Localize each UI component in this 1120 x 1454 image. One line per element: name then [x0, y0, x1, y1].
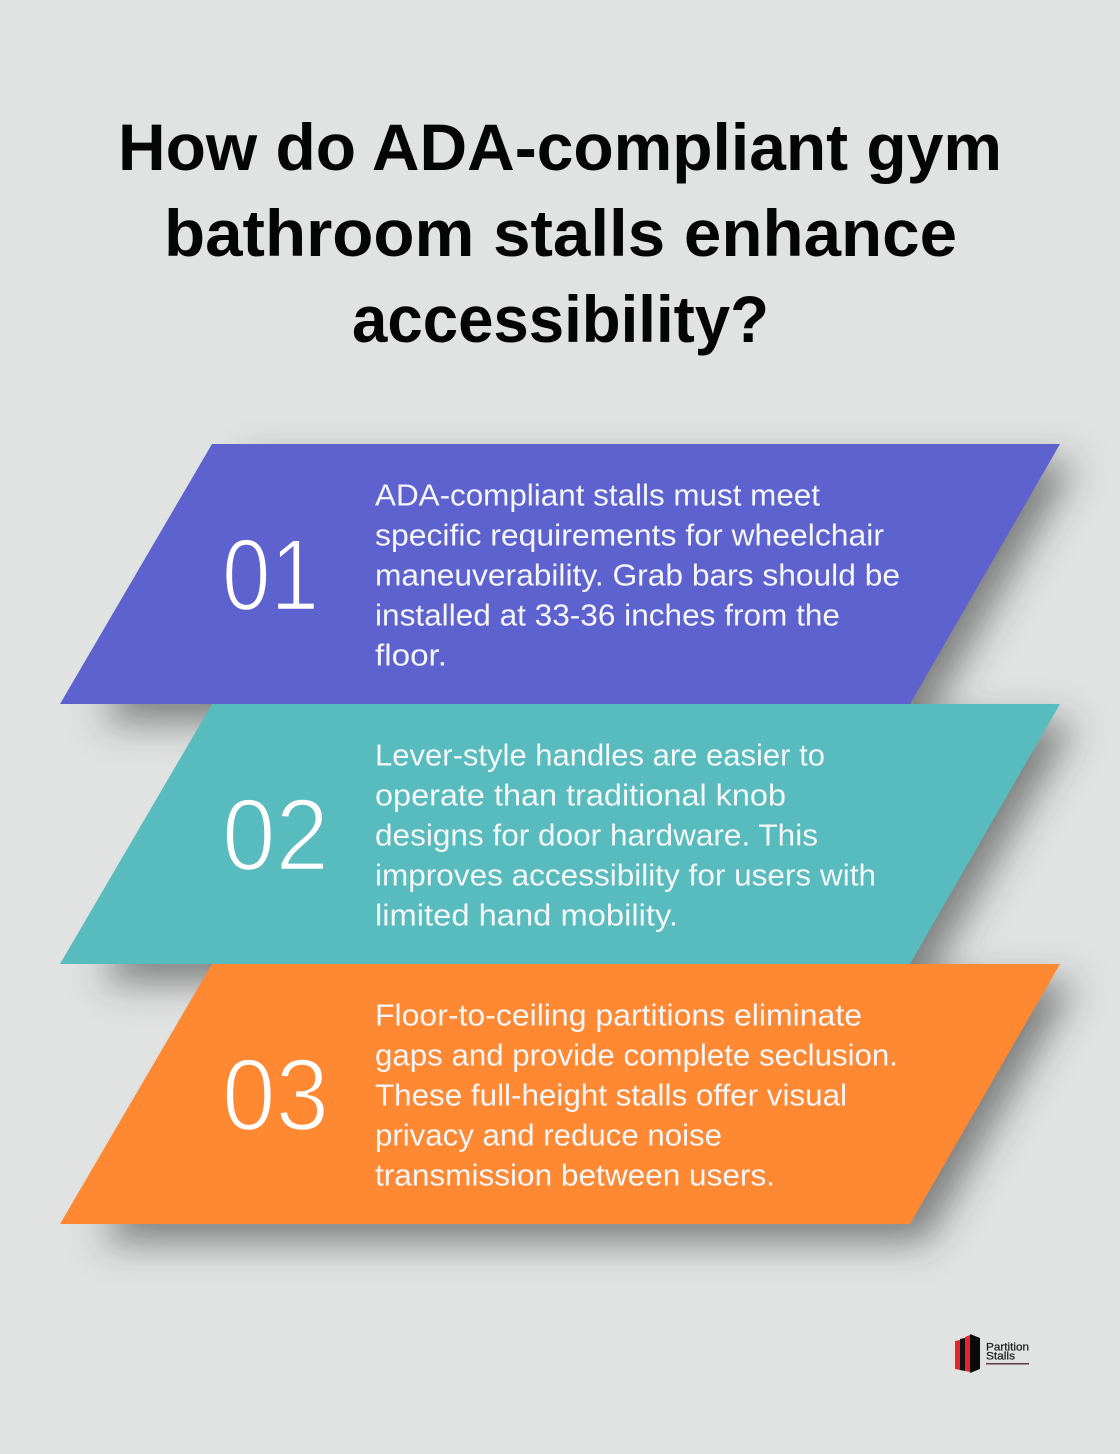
logo wordmark: Partition	[986, 1342, 1029, 1354]
icon: partition panels	[955, 1334, 980, 1373]
text block: step 02: operate than traditional knob	[375, 778, 786, 812]
text block: step 02: improves accessibility for users with	[375, 858, 876, 892]
text block: step 02: Lever-style handles are easier to	[375, 738, 825, 772]
text block: step 01: maneuverability. Grab bars should be	[375, 558, 900, 592]
text block: step 01	[375, 478, 900, 672]
text block: step 03: privacy and reduce noise	[375, 1118, 722, 1152]
text block: step 02: designs for door hardware. This	[375, 818, 818, 852]
number 03: 03	[222, 1038, 329, 1152]
text block: step 01: installed at 33-36 inches from the	[375, 598, 840, 632]
band: purple	[60, 444, 1060, 704]
text block: step 02: limited hand mobility.	[375, 898, 678, 932]
logo wordmark	[986, 1342, 1029, 1365]
title: accessibility?	[352, 282, 769, 356]
text block: step 01: floor.	[375, 638, 447, 672]
text block: step 03: gaps and provide complete seclusion.	[375, 1038, 898, 1072]
logo: Partition Stalls	[955, 1334, 1029, 1373]
number 01: 01	[222, 518, 319, 632]
band: teal	[60, 704, 1060, 964]
text block: step 03	[375, 998, 898, 1192]
title	[118, 110, 1002, 356]
text block: step 01: specific requirements for wheelchair	[375, 518, 884, 552]
panel: step 02	[60, 704, 1060, 964]
logo wordmark: Stalls	[986, 1350, 1016, 1362]
text block: step 01: ADA-compliant stalls must meet	[375, 478, 820, 512]
band: orange	[60, 964, 1060, 1224]
title: How do ADA-compliant gym	[118, 110, 1002, 184]
title: bathroom stalls enhance	[164, 196, 957, 270]
text block: step 03: transmission between users.	[375, 1158, 775, 1192]
text block: step 03: These full-height stalls offer visual	[375, 1078, 847, 1112]
text block: step 02	[375, 738, 876, 932]
number 02: 02	[222, 778, 329, 892]
band shadows	[100, 462, 1076, 1242]
text block: step 03: Floor-to-ceiling partitions eliminate	[375, 998, 862, 1032]
panel: step 03	[60, 964, 1060, 1224]
panel: step 01	[60, 444, 1060, 704]
